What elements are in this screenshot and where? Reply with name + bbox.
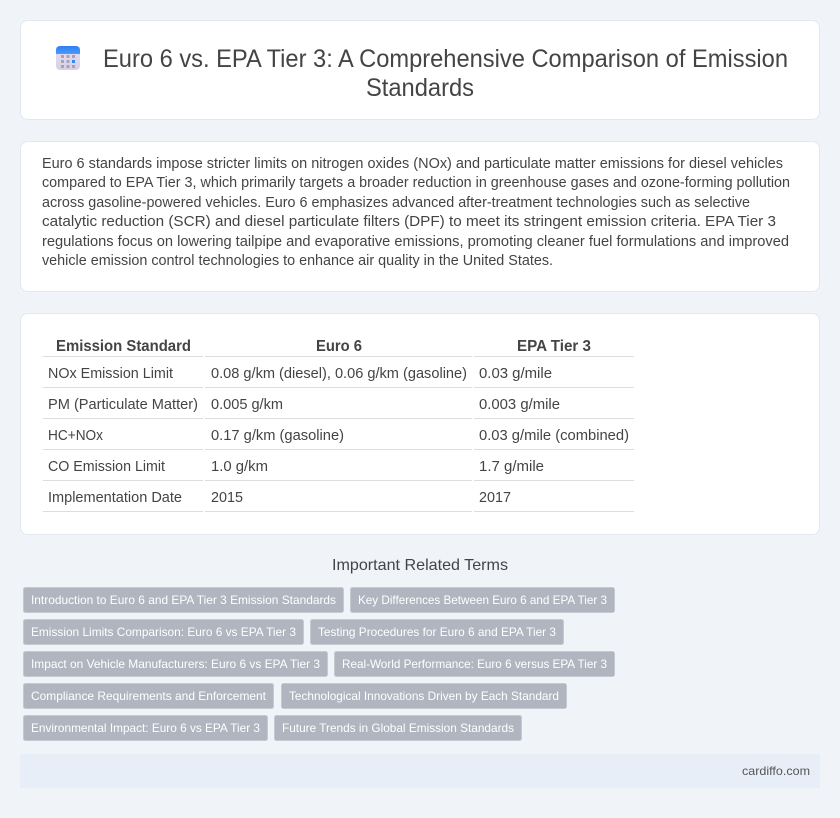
table row: CO (48, 459, 544, 475)
title (103, 45, 788, 102)
table row: implementation date: 2015 (211, 490, 243, 506)
table row: CO: 1.7 g/mile (479, 459, 544, 475)
tag: Environmental Impact: Euro 6 vs EPA Tier 3 (31, 721, 260, 735)
table row: NOx: NOx Emission Limit (48, 366, 173, 382)
footer (20, 754, 820, 788)
tag (24, 620, 304, 644)
table row: PM (48, 397, 560, 413)
tag: Impact on Vehicle Manufacturers: Euro 6 vs EPA Tier 3 (31, 657, 320, 671)
tag (24, 716, 268, 740)
panel: comparison table (20, 314, 820, 534)
tag: Compliance Requirements and Enforcement (31, 689, 267, 703)
table row: implementation date (48, 490, 511, 506)
tag: Key Differences Between Euro 6 and EPA Tier 3 (358, 593, 607, 607)
tag: Emission Limits Comparison: Euro 6 vs EPA Tier 3 (31, 625, 296, 639)
tag (334, 652, 614, 676)
text block: summary: regulations focus on lowering tailpipe and evaporative emissions, promoting cleaner fuel formulations and improved (42, 234, 789, 250)
tag: Future Trends in Global Emission Standards (282, 721, 514, 735)
table header (56, 338, 591, 355)
table row: HC+NOx (48, 428, 629, 444)
tag (274, 716, 522, 740)
table row: NOx: 0.03 g/mile (479, 366, 552, 382)
tag: Introduction to Euro 6 and EPA Tier 3 Emission Standards (31, 593, 336, 607)
table header: Euro 6 (316, 338, 362, 355)
tag (282, 684, 566, 708)
text block: summary: across gasoline-powered vehicles. Euro 6 emphasizes advanced after-treatment technologies such as selective (42, 195, 750, 211)
text block: summary (42, 156, 790, 269)
panel: title card (20, 20, 820, 120)
table row: HC+NOx: HC+NOx (48, 428, 104, 444)
text block: summary: compared to EPA Tier 3, which primarily targets a broader reduction in greenhouse gases and ozone-forming pollution (42, 175, 790, 191)
table row: CO: CO Emission Limit (48, 459, 165, 475)
table row: HC+NOx: 0.17 g/km (gasoline) (211, 428, 344, 444)
panel: summary paragraph (20, 142, 820, 292)
table row: implementation date: Implementation Date (48, 490, 182, 506)
panel: related term tags (24, 588, 614, 740)
icon: calendar (56, 46, 80, 70)
table row: NOx: 0.08 g/km (diesel), 0.06 g/km (gasoline) (211, 366, 467, 382)
tag (24, 652, 328, 676)
text block: summary: vehicle emission control technologies to enhance air quality in the United States. (42, 253, 553, 269)
heading: related terms: Important Related Terms (332, 557, 508, 574)
table row: CO: 1.0 g/km (211, 459, 268, 475)
table row: PM: PM (Particulate Matter) (48, 397, 198, 413)
title: Euro 6 vs. EPA Tier 3: A Comprehensive Comparison of Emission (103, 45, 788, 73)
table row: PM: 0.005 g/km (211, 397, 283, 413)
tag (350, 588, 614, 612)
tag: Testing Procedures for Euro 6 and EPA Tier 3 (318, 625, 556, 639)
table row: implementation date: 2017 (479, 490, 511, 506)
footer: cardiffo.com (742, 764, 810, 778)
table row: PM: 0.003 g/mile (479, 397, 560, 413)
table header: Emission Standard (56, 338, 191, 355)
tag: Real-World Performance: Euro 6 versus EPA Tier 3 (342, 657, 607, 671)
text block: summary: catalytic reduction (SCR) and diesel particulate filters (DPF) to meet its stringent emission criteria. EPA Tier 3 (42, 214, 776, 230)
title: Standards (366, 74, 474, 102)
text block: summary: Euro 6 standards impose stricter limits on nitrogen oxides (NOx) and particulate matter emissions for diesel vehicles (42, 156, 783, 172)
tag (310, 620, 564, 644)
tag: Technological Innovations Driven by Each Standard (289, 689, 559, 703)
table row: NOx (48, 366, 552, 382)
tag (24, 588, 344, 612)
table header: EPA Tier 3 (517, 338, 591, 355)
tag (24, 684, 274, 708)
table row: HC+NOx: 0.03 g/mile (combined) (479, 428, 629, 444)
